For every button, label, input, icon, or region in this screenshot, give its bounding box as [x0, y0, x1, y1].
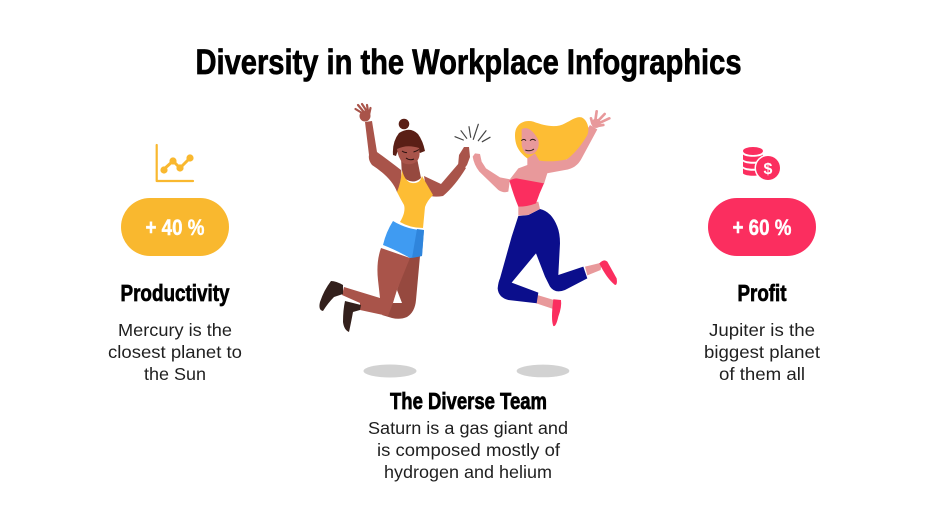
icon: line chart [157, 145, 194, 181]
stat pill: +60%: + 60 % [732, 215, 792, 240]
stat pill: +60% [708, 198, 816, 256]
gap between legs [393, 290, 402, 303]
panel: the diverse team [368, 388, 568, 482]
text: productivity description: the Sun [144, 364, 206, 384]
text: productivity description: closest planet to [108, 342, 242, 362]
heading: the diverse team: The Diverse Team [390, 388, 547, 414]
front leg [342, 248, 410, 316]
ankles [536, 295, 556, 309]
shorts [383, 221, 424, 258]
icon: coins: $ [764, 161, 773, 178]
chest [509, 152, 548, 184]
text: profit description: biggest planet [704, 342, 820, 362]
shoes [552, 299, 561, 326]
illustration: dark-skinned woman jumping [319, 104, 470, 378]
text: team description [368, 418, 568, 482]
text: team description: Saturn is a gas giant and [368, 418, 568, 438]
shadow [517, 365, 569, 377]
neck [401, 158, 421, 182]
pants [498, 209, 587, 303]
text: productivity description: Mercury is the [118, 320, 232, 340]
text: team description: hydrogen and helium [384, 462, 552, 482]
clapping arm [473, 153, 510, 192]
stat pill: +40%: + 40 % [146, 215, 204, 240]
text: productivity description [108, 320, 242, 384]
belly [518, 202, 540, 216]
raised hand [591, 111, 609, 128]
title: Diversity in the Workplace Infographics [196, 43, 742, 82]
face details [521, 139, 536, 151]
clap lines [455, 124, 490, 142]
shadow [364, 364, 416, 378]
icon: coins [743, 147, 782, 182]
face [522, 128, 539, 154]
raised arm [365, 121, 402, 192]
face details [402, 150, 419, 160]
heading: productivity: Productivity [120, 280, 230, 306]
stat pill: +40% [121, 198, 229, 256]
panel: productivity [108, 145, 242, 384]
text: profit description [704, 320, 820, 384]
raised hand [356, 104, 370, 122]
text: team description: is composed mostly of [377, 440, 560, 460]
text: profit description: Jupiter is the [709, 320, 815, 340]
boots [319, 281, 343, 311]
tube top [509, 178, 544, 207]
raised arm [539, 125, 597, 173]
clapping arm [424, 163, 466, 197]
tank top [397, 170, 433, 228]
hair [515, 117, 588, 161]
illustration: blonde woman jumping [473, 111, 617, 377]
hair and face [399, 119, 409, 129]
panel: profit [704, 147, 820, 384]
text: profit description: of them all [719, 364, 805, 384]
clapping hand [458, 147, 470, 170]
back leg [382, 256, 420, 319]
heading: profit: Profit [738, 280, 787, 306]
